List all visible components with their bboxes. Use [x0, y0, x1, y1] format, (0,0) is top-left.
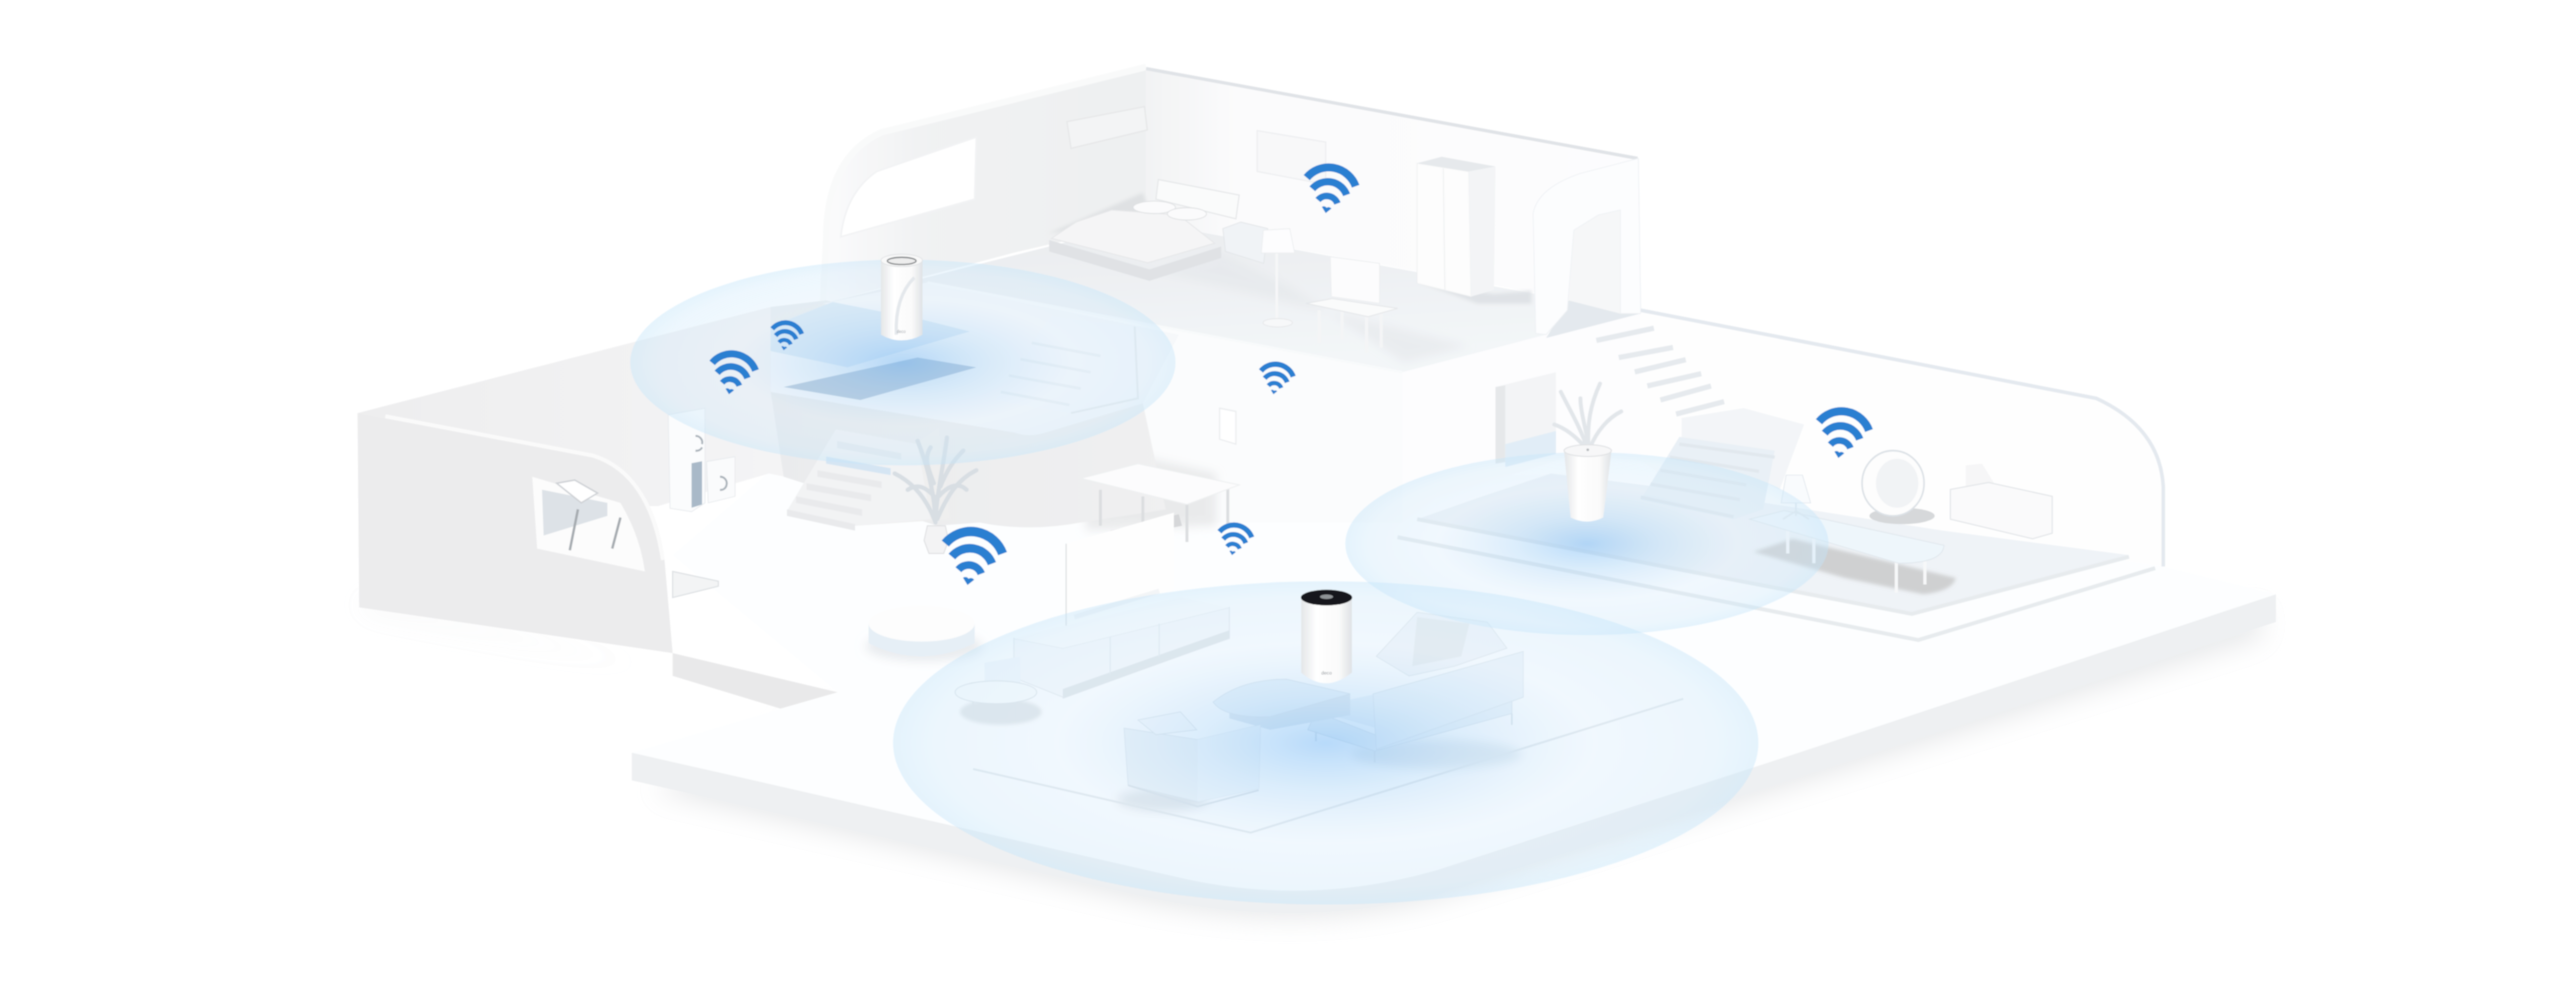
- sideboard: [1014, 607, 1229, 697]
- coffee table: [1229, 694, 1350, 730]
- table shadow: [1753, 539, 1956, 594]
- wall window: [532, 477, 645, 571]
- slab top surface: [632, 473, 2276, 891]
- upper left wall: [823, 67, 1146, 304]
- rug outline: [973, 699, 1683, 833]
- egg chair: [1869, 508, 1935, 524]
- armchair: [1117, 789, 1208, 811]
- wifi icon: right room: [1813, 407, 1872, 462]
- mezzanine with opening: [771, 282, 1402, 527]
- right room wall and floor: [1398, 310, 2163, 640]
- floor slab: [632, 473, 2276, 913]
- right wall face: [1402, 310, 1641, 522]
- tall speaker: [668, 408, 705, 512]
- desk: [1319, 310, 1381, 353]
- bed: [1156, 180, 1239, 219]
- wifi icon: lower floor large: [939, 527, 1005, 590]
- coverage bubble: right lounge: [1345, 452, 1829, 635]
- floor lamp: [1276, 253, 1278, 322]
- doorway: [1496, 372, 1556, 464]
- monitor: [1330, 257, 1380, 303]
- mezzanine left inner wall: [771, 300, 931, 353]
- lower table: [1081, 464, 1239, 542]
- cabinet: [1966, 464, 1995, 490]
- router: mezzanine: [881, 254, 922, 340]
- speakers: [668, 408, 735, 512]
- bedroom furniture: [1049, 157, 1496, 353]
- router logo: deco: [897, 329, 906, 334]
- wifi icon: mezzanine left: [707, 350, 758, 398]
- front wall: [927, 282, 1402, 522]
- upper stairs: [994, 317, 1138, 413]
- mezzanine top: [771, 282, 1179, 435]
- wifi icon: lower floor small: [1216, 522, 1253, 558]
- landing: [1682, 408, 1804, 490]
- living room furniture: [955, 591, 1523, 811]
- router: [1564, 451, 1611, 522]
- short speaker: [707, 457, 735, 503]
- upper right wall: [1146, 67, 1641, 313]
- plant: [1554, 384, 1621, 447]
- wifi icon: centre wall: [1257, 362, 1295, 397]
- window: [841, 137, 976, 237]
- potted plant: [895, 438, 976, 553]
- mezzanine underside wall: [771, 392, 1166, 527]
- upper floor soft shadows: [1045, 245, 1469, 362]
- sofa: [1352, 740, 1522, 769]
- arched end wall: [1533, 158, 1641, 338]
- air conditioner: [1067, 107, 1147, 148]
- coverage bubble: mezzanine: [630, 260, 1176, 465]
- house scene: [358, 67, 2276, 917]
- TV panel: [1066, 513, 1174, 629]
- right staircases: [1596, 328, 1804, 519]
- picture frame: [1257, 131, 1326, 185]
- low table: [673, 571, 718, 598]
- left front wall: [358, 413, 718, 653]
- nightstand: [1223, 222, 1268, 263]
- upper floor: [823, 193, 1546, 372]
- robot vacuum: [865, 606, 983, 661]
- table lamp: [1783, 503, 1809, 519]
- wall light switch panel: [1220, 408, 1236, 444]
- upper storey walls: [823, 67, 1641, 313]
- slab side edge: [632, 594, 2276, 913]
- router logo: deco: [1321, 670, 1332, 676]
- wifi icon: mezzanine small: [769, 320, 803, 353]
- left room back wall: [358, 300, 849, 506]
- wardrobe: [1417, 163, 1471, 297]
- ground shadow: [359, 601, 2261, 917]
- left lower stairs: [787, 428, 950, 531]
- router: living room: [1301, 590, 1352, 683]
- wifi icon: bedroom: [1301, 164, 1358, 217]
- lower storey block walls: [927, 282, 1641, 531]
- upper flight: [1596, 328, 1724, 414]
- table wall shadow: [1086, 457, 1216, 531]
- bench table: [1788, 522, 1925, 593]
- stepped platform: [1417, 473, 2129, 612]
- lounge furniture: [1750, 451, 2052, 594]
- coverage bubble: living room: [893, 581, 1758, 904]
- glass landing: [771, 302, 970, 367]
- dark floor rug: [784, 358, 976, 400]
- chair in window: [570, 509, 620, 550]
- plant and router: right lounge: [1554, 384, 1621, 522]
- second chair: [1376, 612, 1507, 676]
- lower flight: [1641, 437, 1775, 519]
- round side table: [960, 699, 1042, 725]
